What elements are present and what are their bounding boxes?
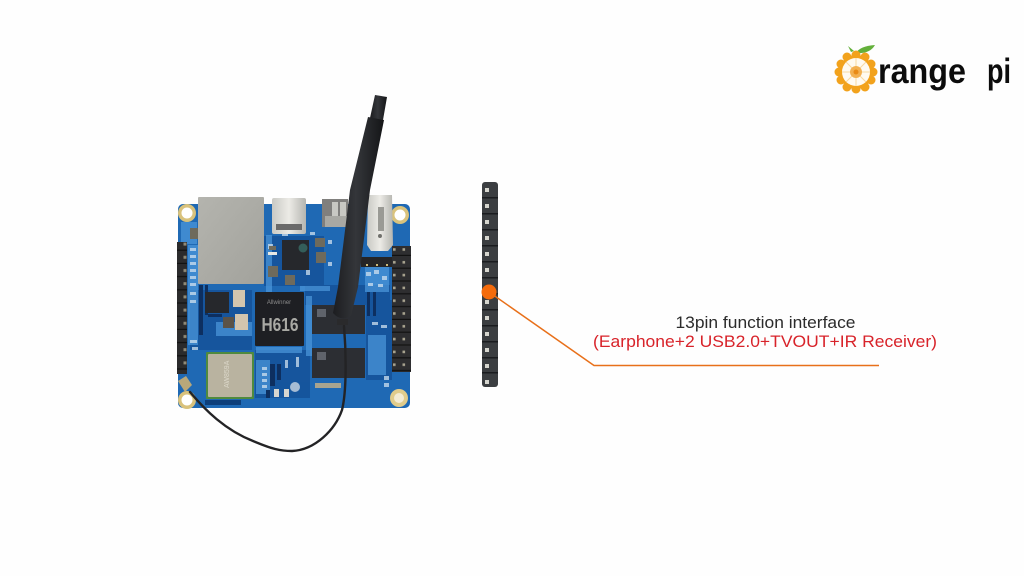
left gpio header: [177, 242, 187, 374]
logo: Orange Pi: [834, 45, 1011, 94]
usb-c port: [272, 198, 306, 234]
chip brand: Allwinner: [267, 300, 291, 306]
wifi module: AW859A: [224, 360, 231, 388]
small 6-pin header: [361, 257, 392, 267]
inductors and capacitors: [190, 228, 326, 285]
chip label: H616: [262, 315, 298, 335]
callout marker dot: [482, 284, 496, 300]
callout leader line: [489, 292, 879, 366]
mounting holes: [178, 204, 409, 409]
ram chips: [312, 305, 365, 378]
logo wordmark: range: range: [878, 52, 966, 91]
right gpio header: [392, 246, 411, 372]
antenna wire: [190, 326, 346, 451]
board: Orange Pi Zero 2: [177, 95, 411, 451]
power ic: [282, 240, 309, 270]
13-pin header: [482, 182, 498, 387]
bottom leds and pads: [205, 382, 341, 405]
cpu: H616: [255, 292, 304, 346]
small ic left: [205, 292, 229, 313]
icon: orange slice: [834, 45, 878, 94]
ethernet port: [198, 197, 264, 284]
usb / hdmi port: [322, 199, 348, 227]
callout title: 13pin function interface: [676, 313, 856, 332]
antenna body: [333, 95, 387, 325]
crystals: [223, 290, 248, 330]
small components and pads: [190, 232, 389, 388]
antenna connector: [178, 376, 192, 392]
logo wordmark: pi: pi: [987, 52, 1011, 91]
callout detail: (Earphone+2 USB2.0+TVOUT+IR Receiver): [593, 332, 937, 351]
micro sd slot: [367, 195, 393, 251]
wifi module: [206, 352, 254, 399]
pcb: [178, 204, 410, 408]
